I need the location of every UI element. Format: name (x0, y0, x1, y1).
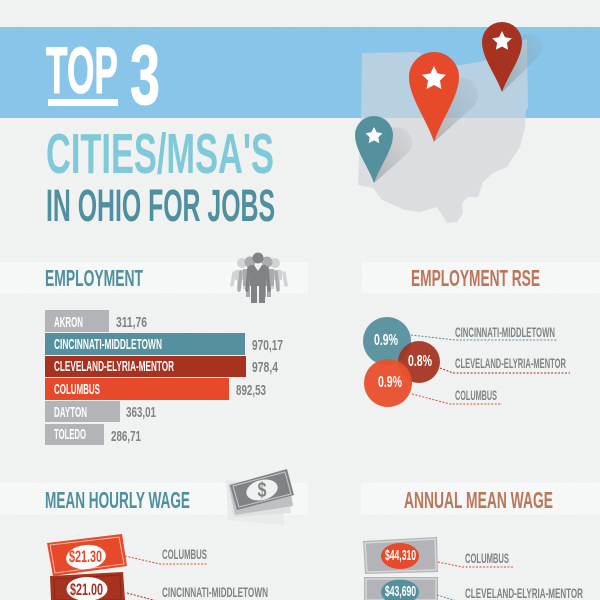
label: Columbus: COLUMBUS (455, 387, 497, 403)
title: top 3: TOP (46, 33, 118, 107)
label: Columbus: COLUMBUS (465, 550, 509, 566)
annual mean wage header band (361, 483, 600, 515)
bar: Toledo (45, 424, 141, 445)
header band (0, 27, 600, 118)
bar: Dayton (45, 401, 156, 422)
label: Cincinnati-Middletown: CINCINNATI-MIDDLETOWN (162, 584, 268, 600)
label: Columbus (412, 387, 502, 404)
label: Columbus (125, 546, 207, 564)
bar: Columbus (45, 378, 266, 400)
bill: Cleveland $43,690 (364, 577, 438, 600)
panel: employment (0, 252, 308, 445)
label: Columbus: COLUMBUS (162, 546, 207, 562)
bar: Cincinnati-Middletown (45, 333, 283, 355)
employment header band (0, 262, 308, 293)
bill: Columbus $44,310 (363, 537, 438, 574)
pin: Columbus orange (409, 52, 478, 142)
circle: Cleveland 0.8%: 0.8% (408, 353, 432, 370)
bill: Columbus $44,310: $44,310 (385, 548, 416, 564)
mean hourly wage header band (0, 483, 308, 515)
label: Cleveland-Elyria-Mentor (440, 355, 570, 373)
icon: money stack (226, 469, 294, 525)
bar: Toledo: 286,71 (111, 428, 141, 445)
bar: Cleveland-Elyria-Mentor: 978,4 (252, 359, 278, 376)
bar: Dayton: DAYTON (54, 404, 87, 421)
bar: Columbus: 892,53 (236, 382, 266, 399)
bar: Akron (45, 310, 147, 332)
heading: mean hourly wage: MEAN HOURLY WAGE (45, 487, 190, 513)
title: top 3 (46, 28, 160, 122)
bar: Dayton: 363,01 (126, 404, 156, 421)
bill: Columbus $21.30 (47, 534, 127, 576)
label: Columbus (438, 550, 513, 567)
map of Ohio (358, 39, 528, 223)
heading: employment: EMPLOYMENT (45, 265, 143, 291)
circle: Cincinnati 0.9% (363, 317, 411, 365)
title: top 3: 3 (130, 28, 160, 122)
icon: group of people (232, 252, 286, 303)
panel: annual mean wage (361, 483, 600, 600)
bar: Cleveland-Elyria-Mentor: CLEVELAND-ELYRIA-MENTOR (54, 358, 174, 375)
bill: Cincinnati $21.00: $21.00 (70, 580, 103, 599)
label: Cincinnati-Middletown (411, 324, 558, 340)
bar: Columbus: COLUMBUS (54, 381, 100, 398)
icon: money stack: $ (258, 479, 267, 502)
bar: Cincinnati-Middletown: 970,17 (252, 337, 283, 354)
pin: Cleveland dark red (482, 22, 542, 92)
bill: Cleveland $43,690: $43,690 (385, 584, 416, 600)
panel: mean hourly wage (0, 469, 308, 600)
title: cities/msa's: CITIES/MSA'S (46, 122, 274, 186)
panel: employment RSE (362, 262, 600, 407)
bar: Akron: AKRON (54, 314, 83, 331)
circle: Cleveland 0.8% (398, 341, 440, 383)
employment RSE header band (362, 262, 600, 293)
title: in ohio for jobs: IN OHIO FOR JOBS (46, 180, 275, 231)
bar: Cincinnati-Middletown: CINCINNATI-MIDDLETOWN (54, 336, 162, 353)
bill: Cincinnati $21.00 (50, 572, 125, 600)
pin: Cincinnati teal (355, 116, 412, 183)
circle: Columbus 0.9% (364, 359, 412, 407)
circle: Cincinnati 0.9%: 0.9% (374, 332, 398, 349)
bar: Toledo: TOLEDO (54, 426, 86, 443)
bar: Akron: 311,76 (116, 314, 147, 331)
bill: Columbus $21.30: $21.30 (69, 547, 102, 566)
circle: Columbus 0.9%: 0.9% (378, 374, 402, 391)
label: Cincinnati-Middletown (127, 584, 268, 600)
